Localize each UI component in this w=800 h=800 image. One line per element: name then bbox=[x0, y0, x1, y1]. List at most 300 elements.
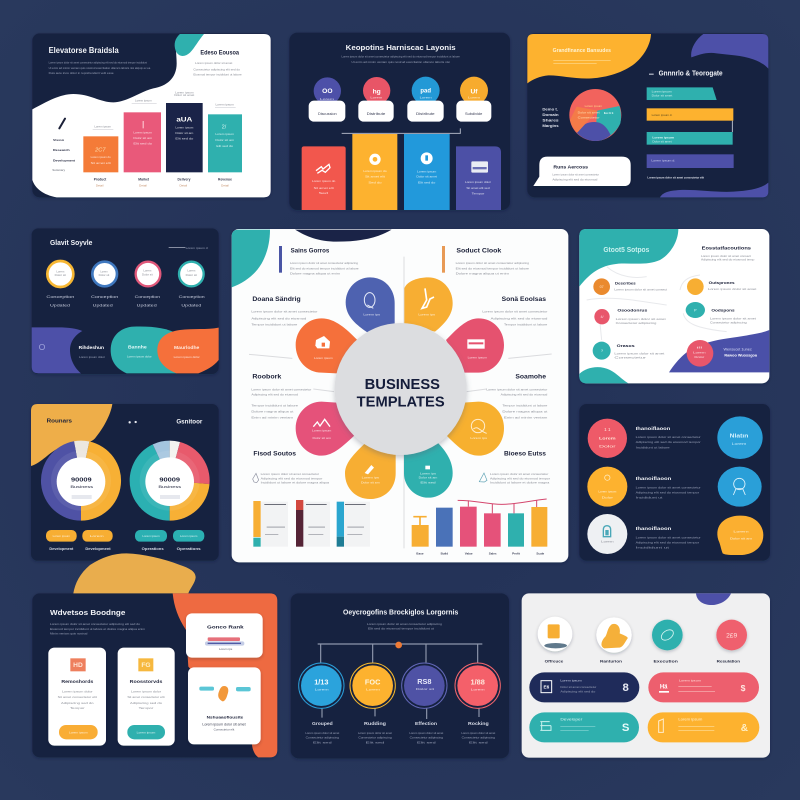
yellow corner shape bbox=[31, 404, 112, 466]
card: second: Tempor bbox=[139, 706, 153, 710]
panel: donut charts, left lower bbox=[31, 404, 219, 561]
panel: circle list, right lower bbox=[579, 404, 770, 561]
title: Oeycrogofins Brockiglos Lorgornis bbox=[343, 607, 458, 616]
bar labels: Profit bbox=[512, 551, 520, 555]
text block: upper right bbox=[482, 297, 548, 327]
petal: yellow bottom: Dolor sit am bbox=[361, 481, 380, 485]
step: orange bbox=[593, 278, 667, 295]
node descriptions: Elit sed bbox=[469, 740, 488, 744]
heading: top right: Lorem ipsum dolor sit amet consectetur adipiscing bbox=[456, 261, 529, 265]
pill: red: Hä bbox=[660, 684, 668, 690]
step: red: hg bbox=[373, 88, 381, 95]
card background bbox=[291, 593, 509, 758]
ring: yellow bbox=[47, 261, 73, 287]
bar top captions: Dolor sit amet bbox=[174, 93, 195, 97]
segment text: navy: Rihdeshun bbox=[79, 345, 104, 350]
top right text: Lorem ipsum dolor sit amet consect bbox=[701, 254, 751, 258]
bar bottom labels: Detail bbox=[139, 184, 147, 188]
column: yellow: Sed do bbox=[368, 181, 382, 185]
text block: upper left: Adipiscing elit sed do eiusmod bbox=[251, 316, 307, 320]
list text: second: Lorem ipsum dolor sit amet consectetur bbox=[636, 486, 701, 490]
card: second: Lorem ipsum bbox=[137, 730, 156, 734]
badge: red: Dolor bbox=[694, 355, 704, 359]
bar: teal: Dolor sit am bbox=[215, 138, 235, 142]
bar chart bbox=[83, 103, 242, 172]
bar bottom labels: Detail bbox=[221, 184, 229, 188]
node: yellow: FOC bbox=[365, 677, 381, 686]
petal: blue: Lorem ips bbox=[363, 313, 381, 317]
legend pills: Lorem bbox=[90, 534, 104, 538]
circle: red bbox=[588, 419, 627, 458]
yellow heading text: Grandfinance Bansudes bbox=[553, 48, 611, 54]
segment text: navy: Lorem ipsum dolor bbox=[79, 355, 105, 359]
strip: teal long bbox=[647, 132, 733, 145]
white wave area bbox=[32, 34, 271, 197]
subtitle: Lorem ipsum dolor sit amet consectetur adipiscing bbox=[367, 622, 442, 626]
icon: red circle: 2£9 bbox=[726, 633, 738, 640]
legend pills: Lorem ipsum bbox=[180, 534, 198, 538]
column: blue: Elit sed do bbox=[418, 181, 436, 185]
subtitle: Ut enim ad minim veniam quis nostrud exercitation ullamco laboris nisi bbox=[351, 60, 450, 64]
legend labels: Development bbox=[53, 159, 75, 163]
ring captions: Updated bbox=[137, 304, 157, 308]
purple wave segment bbox=[32, 327, 82, 373]
teal wave segment: Bannhe bbox=[128, 344, 147, 349]
node: purple: RS8 bbox=[417, 677, 431, 686]
purple top blob bbox=[696, 593, 731, 605]
petal: yellow right: Lorem ips bbox=[470, 436, 488, 440]
step: teal right bbox=[686, 302, 756, 325]
list text: first bbox=[636, 426, 701, 449]
bar: teal bbox=[208, 114, 242, 172]
text block: middle right: Tempor incididunt ut labore bbox=[502, 404, 548, 408]
column: yellow: Lorem ipsum do bbox=[363, 169, 387, 173]
strip: yellow bbox=[647, 108, 733, 121]
blob: yellow: Lorem bbox=[733, 530, 750, 534]
petal: red: Lorem ipsum bbox=[468, 356, 488, 360]
pill: red: $ bbox=[741, 683, 746, 693]
bar: teal: Elit sed do bbox=[216, 144, 233, 148]
pie legend labels: Shares bbox=[542, 119, 559, 123]
circle: red: Dolor bbox=[599, 443, 617, 448]
white speech card: Runs Aercoss bbox=[553, 165, 588, 170]
yellow heading text bbox=[553, 48, 611, 64]
step: teal left: Lorem ipsum dolor sit amet bbox=[614, 352, 665, 356]
list text: third: Lorem ipsum dolor sit amet consectetur bbox=[636, 536, 701, 540]
pill: teal bbox=[529, 712, 639, 742]
step: teal left: ? bbox=[601, 348, 604, 353]
panel: bar chart card, top left bbox=[32, 33, 271, 197]
panel: four step layout, top centre bbox=[289, 33, 510, 210]
text block: upper right: Adipiscing elit sed do eiusmod bbox=[491, 316, 548, 320]
heading: top left: Dolore magna aliqua ut enim bbox=[290, 272, 341, 276]
list text: first: Adipiscing elit sed do eiusmod tempor bbox=[636, 440, 701, 444]
petal: teal: Lorem ips bbox=[420, 471, 437, 475]
node captions: Rudding bbox=[364, 721, 386, 726]
bar labels: Build bbox=[441, 551, 448, 555]
bar labels bbox=[416, 551, 545, 555]
card: bottom right: Nshuaaoflousite bbox=[207, 716, 243, 720]
pill: teal: Developer bbox=[560, 718, 584, 722]
ring captions: Updated bbox=[181, 304, 201, 308]
heading: top left: Elit sed do eiusmod tempor incididunt ut labore bbox=[290, 266, 359, 270]
node: red: 1/88 bbox=[471, 677, 485, 686]
text block: upper left: Tempor incididunt ut labore bbox=[251, 323, 298, 327]
petal: pink bbox=[296, 402, 355, 456]
description text: left: Ut enim ad minim veniam quis nostrud exercitation ullamco laboris nisi aliquip ex ea bbox=[49, 66, 151, 70]
strip: yellow: Lorem ipsum d. bbox=[652, 113, 672, 117]
description text: right: Consectetur adipiscing elit sed do bbox=[193, 67, 240, 71]
icon labels: Execution bbox=[653, 659, 679, 664]
text block: lower left: Lorem ipsum dolor sit amet consectetur bbox=[261, 472, 319, 476]
teal corner shape bbox=[232, 230, 270, 287]
bar bottom labels: Product bbox=[94, 178, 107, 182]
card: first bbox=[48, 648, 106, 746]
column: blue: Lorem ipsum bbox=[417, 169, 437, 173]
petal: yellow bottom: Lorem ips bbox=[362, 476, 380, 480]
headings bbox=[47, 418, 203, 425]
text block: middle right: Dolore magna aliqua ut bbox=[502, 409, 548, 413]
description: Eiusmod tempor incididunt ut labore et dolore magna aliqua enim bbox=[50, 627, 146, 631]
column: red bbox=[302, 146, 346, 210]
bar: navy: Elit sed do bbox=[175, 136, 194, 140]
text block: middle right: Lorem ipsum dolor sit amet consectetur bbox=[486, 387, 547, 391]
strip: teal short: Lorem ipsum bbox=[652, 90, 673, 94]
petal: teal bbox=[404, 442, 453, 498]
segment text: navy bbox=[79, 345, 105, 359]
step: yellow: Subdivide bbox=[465, 112, 482, 116]
badge: red: ill bbox=[696, 346, 703, 350]
pill: red bbox=[648, 672, 759, 702]
card: top right: Gonco Rank bbox=[207, 624, 244, 630]
bar: orange bbox=[83, 136, 118, 172]
icon labels: Ranturion bbox=[600, 659, 623, 664]
teal wave segment: Lorem ipsum dolor bbox=[127, 355, 152, 359]
card: bottom right bbox=[188, 667, 261, 744]
list text: first: Ihanoiflaoon bbox=[636, 426, 670, 432]
bar bottom labels: Delivery bbox=[178, 178, 191, 182]
strip: teal short: Dolor sit amet bbox=[652, 93, 673, 97]
icon labels bbox=[545, 659, 741, 664]
connector dot bbox=[395, 642, 402, 648]
purple card text: Wensucet 1unec bbox=[723, 347, 752, 351]
card background bbox=[31, 404, 219, 561]
text block: upper left: Lorem ipsum dolor sit amet consectetur bbox=[251, 310, 317, 314]
step: yellow bbox=[687, 278, 757, 295]
description: Minim veniam quis nostrud bbox=[50, 632, 88, 636]
legend captions: Operations bbox=[142, 547, 164, 551]
orange wave segment: Lorem ipsum dolor bbox=[174, 355, 200, 359]
card background bbox=[232, 229, 568, 562]
panel: pie and strips, top right bbox=[527, 33, 768, 197]
yellow corner wave bbox=[527, 34, 651, 83]
heading: top right bbox=[442, 246, 529, 276]
pie legend labels: Demo t. bbox=[542, 107, 558, 111]
column: yellow: Sit amet elit bbox=[365, 174, 385, 178]
title: BUSINESS bbox=[365, 376, 440, 393]
card background bbox=[522, 593, 770, 758]
bar labels: Base bbox=[416, 551, 424, 555]
ring captions bbox=[46, 295, 205, 308]
column: red: Sed bbox=[319, 191, 329, 195]
node: yellow: Lorem bbox=[366, 687, 381, 691]
strip: purple bbox=[647, 154, 734, 168]
card: second: FG bbox=[141, 662, 151, 669]
node: blue bbox=[299, 663, 344, 708]
step: yellow: Outsprones bbox=[709, 280, 736, 285]
teal corner blob bbox=[175, 34, 204, 56]
circle: yellow bbox=[587, 467, 627, 507]
top right text: Eosstatfacoutions bbox=[702, 245, 751, 251]
step: blue: Distribute bbox=[416, 112, 435, 116]
card background bbox=[32, 228, 219, 374]
legend labels: Summary bbox=[52, 168, 65, 172]
description text: left: Duis aute irure dolor in reprehenderit velit esse bbox=[49, 71, 114, 75]
circle: blue with text bbox=[717, 416, 763, 459]
icon labels: Offreuce bbox=[545, 659, 564, 664]
ring captions: Updated bbox=[93, 304, 113, 308]
step: purple: OO bbox=[322, 88, 333, 95]
card background bbox=[32, 33, 271, 197]
step: red: Distribute bbox=[367, 112, 386, 116]
panel: teal steps card, right middle bbox=[579, 229, 769, 383]
step: teal right: P bbox=[694, 308, 697, 312]
text block: lower right: Adipiscing elit sed do eiusmod tempor bbox=[490, 476, 550, 480]
teal corner wave bbox=[579, 229, 678, 287]
heading: right: Edeso Eousoa bbox=[200, 49, 239, 56]
ring: yellow: Lorem bbox=[56, 269, 65, 273]
petal: orange bbox=[296, 318, 357, 373]
circle: blue with text: Lorem bbox=[732, 442, 747, 446]
card background bbox=[579, 229, 769, 383]
text block: middle left: Roobork bbox=[252, 374, 282, 380]
heading: Glavit Soyvle bbox=[50, 238, 92, 247]
legend labels: Vision bbox=[53, 138, 64, 142]
mini table: maroon bbox=[296, 500, 330, 547]
pie chart: Dolor sit amet bbox=[578, 110, 600, 114]
step: teal right: Oodspons bbox=[711, 307, 736, 312]
icon labels: Resulation bbox=[717, 659, 741, 664]
text block: upper right: Sonä Eoolsas bbox=[502, 297, 547, 303]
centre divider bbox=[402, 257, 405, 548]
bar: orange: Lorem ipsum do bbox=[91, 155, 111, 159]
ring: yellow: Dolor sit bbox=[55, 273, 66, 277]
icon: teal tags bbox=[199, 687, 251, 691]
description text: right: Lorem ipsum dolor sit amet bbox=[195, 61, 232, 65]
bar: pink: Dolor sit am bbox=[133, 136, 153, 140]
bar bottom labels: Detail bbox=[96, 184, 104, 188]
pill: navy: Dolor sit amet consectetur bbox=[560, 685, 596, 689]
node descriptions: Elit sed bbox=[313, 740, 332, 744]
bar: navy: Dolor sit am bbox=[175, 131, 194, 135]
column: purple: Tempor bbox=[472, 192, 484, 196]
legend pills: Lorem ipsum bbox=[53, 534, 71, 538]
ring captions: Conception bbox=[135, 295, 160, 299]
step: pink: Consectetur adipiscing bbox=[616, 321, 657, 325]
subtitle: Elit sed do eiusmod tempor incididunt ut bbox=[368, 626, 434, 630]
ring captions: Conception bbox=[46, 295, 74, 299]
legend labels bbox=[52, 138, 75, 172]
legend captions: Development bbox=[85, 547, 112, 551]
navy top bump bbox=[295, 230, 392, 242]
node: red bbox=[455, 663, 500, 708]
step: purple bbox=[309, 77, 345, 122]
card: second: Sit amet consectetur elit bbox=[127, 695, 165, 699]
step: red: Lorem bbox=[370, 96, 383, 100]
step: blue bbox=[407, 77, 444, 122]
text block: middle left: Dolore magna aliqua ut bbox=[251, 409, 294, 413]
column: blue: Dolor sit amet bbox=[416, 175, 437, 179]
list text: second bbox=[636, 476, 701, 500]
node: blue: 1/13 bbox=[314, 677, 328, 686]
list text: third: Adipiscing elit sed do eiusmod tempor bbox=[636, 541, 699, 545]
node: yellow bbox=[350, 663, 395, 708]
step: teal left bbox=[593, 342, 665, 360]
central circle bbox=[335, 323, 467, 455]
legend captions bbox=[49, 547, 201, 551]
text block: lower right bbox=[479, 452, 550, 484]
icon: red circle bbox=[716, 620, 747, 650]
list text: second: Adipiscing elit sed do eiusmod tempor bbox=[636, 491, 699, 495]
text block: upper right: Lorem ipsum dolor sit amet consectetur bbox=[482, 310, 547, 314]
title: TEMPLATES bbox=[357, 394, 445, 411]
panel: chart styles, left middle bbox=[32, 228, 219, 374]
icon: orange drop bbox=[218, 686, 228, 701]
top right text bbox=[701, 245, 755, 262]
subtitle bbox=[367, 622, 442, 630]
blob: yellow bbox=[717, 516, 763, 555]
node: purple bbox=[402, 663, 447, 708]
pill: red: Lorem ipsum bbox=[679, 678, 702, 682]
text block: lower right: Bioeso Eutss bbox=[504, 452, 547, 458]
petal: yellow top bbox=[404, 277, 453, 332]
step: teal left: Orasos bbox=[617, 343, 636, 348]
circle: red: 1 1 bbox=[604, 427, 611, 432]
node descriptions: Lorem ipsum dolor sit amet bbox=[409, 731, 443, 735]
step: yellow: Lorem bbox=[468, 96, 481, 100]
ring: pink bbox=[136, 262, 160, 286]
bar: navy: aUA bbox=[176, 116, 193, 123]
icon: yellow box bbox=[538, 617, 572, 651]
pill: yellow: & bbox=[741, 723, 748, 734]
node captions: Grouped bbox=[312, 721, 333, 726]
card: first: Lorem ipsum dolor bbox=[62, 689, 93, 693]
step: yellow bbox=[456, 77, 491, 122]
step: red bbox=[358, 77, 394, 122]
ring: blue bbox=[92, 262, 117, 286]
node descriptions: Consectetur adipiscing bbox=[358, 736, 392, 740]
list text: third bbox=[636, 526, 701, 550]
pie legend labels: Domain bbox=[542, 113, 559, 117]
petal: yellow bottom bbox=[345, 442, 396, 499]
icon: pen bbox=[51, 113, 72, 135]
ring: blue: Dolor sit bbox=[99, 273, 109, 277]
strip outline bbox=[731, 121, 734, 132]
list text: second: Ihanoiflaoon bbox=[636, 476, 671, 482]
strip caption: Lorem ipsum dolor sit amet consectetur elit bbox=[647, 176, 704, 180]
title: Keopotins Harniscac Layonis bbox=[346, 43, 456, 52]
step: pink: Osoodonrus bbox=[617, 308, 648, 313]
orange wave segment: Maurlodhe bbox=[174, 345, 200, 350]
purple card text bbox=[723, 347, 757, 358]
circle: yellow: Lorem ipsum bbox=[598, 490, 617, 494]
strip: teal short bbox=[647, 87, 717, 100]
pill: navy: E6 bbox=[543, 685, 550, 690]
card: first: Adipiscing sed do bbox=[61, 701, 94, 705]
panel: org connector layout, bottom centre bbox=[291, 593, 509, 758]
step: pink: 4/ bbox=[600, 315, 605, 319]
ring: teal bbox=[179, 262, 204, 286]
step: teal left: Consectetur bbox=[614, 355, 646, 359]
list text: first: Incididunt ut labore bbox=[636, 445, 670, 449]
heading: top right: Dolore magna aliqua ut enim bbox=[456, 272, 510, 276]
petal: yellow right bbox=[446, 402, 504, 456]
node descriptions bbox=[305, 731, 495, 744]
title bbox=[357, 376, 445, 411]
card: first: Remoshords bbox=[61, 679, 94, 684]
badge: red: Lorem bbox=[693, 350, 706, 354]
teal bottom wave bbox=[579, 367, 628, 383]
card: second: Roosstorvds bbox=[130, 679, 163, 684]
step: teal right: Consectetur adipiscing bbox=[710, 321, 747, 325]
text block: middle left: Tempor incididunt ut labore bbox=[251, 404, 298, 408]
node: blue: Lorem bbox=[315, 688, 330, 692]
trend line bbox=[413, 499, 547, 525]
mini table: yellow bbox=[253, 501, 288, 547]
badge: red bbox=[687, 340, 713, 367]
node: red: Lorem bbox=[471, 687, 485, 691]
text block: middle left: Adipiscing elit sed do eiusmod bbox=[251, 393, 298, 397]
pie chart: Lorem ipsum bbox=[585, 104, 603, 108]
circle: blue with icon bbox=[718, 467, 762, 507]
card background bbox=[289, 33, 510, 210]
bar: teal: Lorem ipsum bbox=[215, 132, 235, 136]
circle: red: Lorem bbox=[599, 435, 616, 440]
icon: teal circle bbox=[652, 620, 683, 650]
petal: orange: Lorem ipsum bbox=[314, 356, 333, 360]
bar bottom labels: Market bbox=[138, 178, 150, 182]
strip: purple: Lorem ipsum d. bbox=[651, 159, 676, 163]
bar: orange: 2C7 bbox=[94, 147, 106, 153]
bar: pink bbox=[124, 112, 161, 172]
bar bottom labels: Detail bbox=[180, 184, 187, 188]
purple blob: top bbox=[691, 34, 768, 69]
top right note bbox=[169, 246, 208, 250]
bar: pink: Elit sed do bbox=[133, 142, 152, 146]
step: yellow: Lorem ipsum dolor sit amet bbox=[708, 287, 757, 291]
description text: left: Lorem ipsum dolor sit amet consectetur adipiscing elit sed do eiusmod tempor incididunt bbox=[49, 61, 147, 65]
description text: left bbox=[49, 61, 151, 75]
petal: red bbox=[446, 318, 504, 373]
petal: blue bbox=[346, 277, 395, 332]
strip: teal long: Lorem ipsum bbox=[652, 136, 674, 140]
node descriptions: Consectetur adipiscing bbox=[410, 736, 443, 740]
list text: second: Incididunt ut bbox=[636, 496, 663, 500]
ring: blue: Lorem bbox=[100, 269, 108, 273]
bar bottom labels: Revenue bbox=[218, 178, 232, 182]
card: first: HD bbox=[73, 662, 83, 669]
heading: top right: Elit sed do eiusmod tempor incididunt ut labore bbox=[456, 266, 529, 270]
donut chart: purple and yellow: Business bbox=[70, 484, 93, 489]
white speech card: Lorem ipsum dolor sit amet consectetur bbox=[552, 172, 599, 176]
card: bottom right: Consectetur elit bbox=[214, 728, 235, 732]
donut chart: teal red yellow bbox=[130, 441, 210, 521]
node captions: Rocking bbox=[468, 721, 489, 726]
text block: upper left bbox=[251, 297, 317, 327]
column: yellow bbox=[352, 134, 397, 210]
ring: teal: Lorem bbox=[187, 269, 196, 273]
node descriptions: Lorem ipsum dolor sit amet bbox=[358, 731, 392, 735]
